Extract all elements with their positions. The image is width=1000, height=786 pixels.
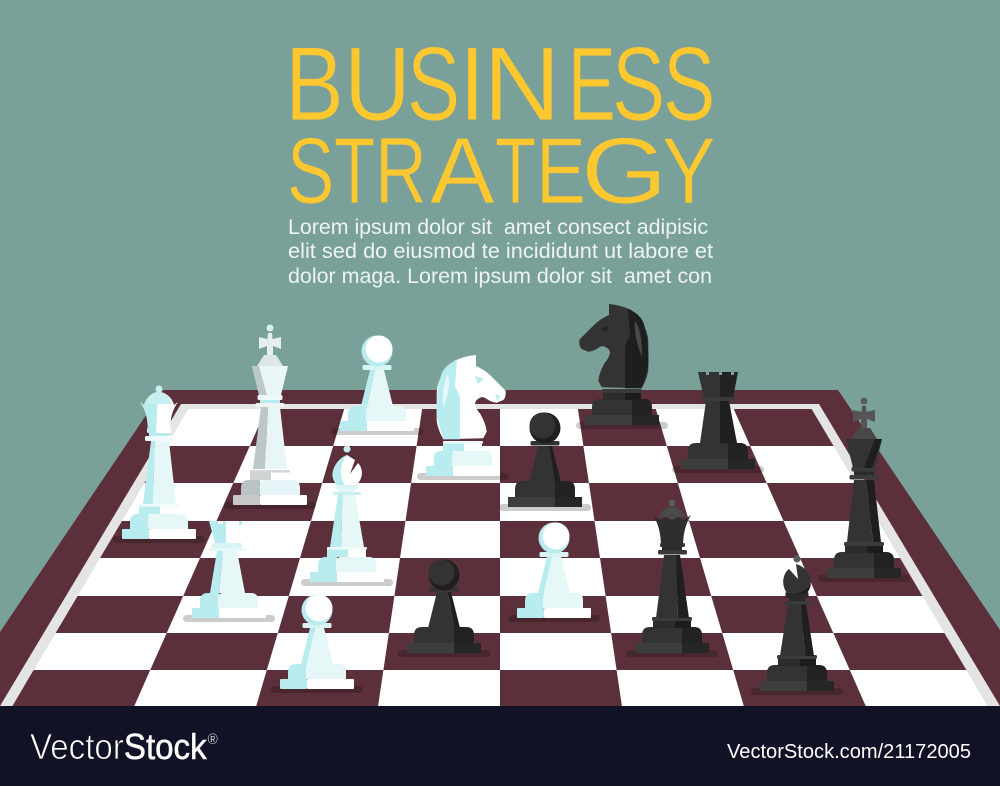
footer logo: ® [208,732,218,748]
intro line 3: dolor maga. Lorem ipsum dolor sit amet con [288,265,712,288]
title: B [285,26,344,143]
title: I [459,26,486,143]
title: T [495,118,536,223]
title: N [483,26,561,143]
board white squares [12,409,988,706]
piece: white rook [183,521,275,622]
piece: black pawn, front [398,560,490,657]
title: G [581,118,668,223]
title: E [536,118,585,223]
piece: white pawn, front [271,594,363,693]
piece: black knight [576,304,668,429]
title: S [612,26,665,143]
piece: white queen [113,386,205,543]
board light border [0,404,1000,706]
title: T [334,118,375,223]
title: R [375,118,427,223]
title: S [662,26,715,143]
footer logo: VectorStock [30,728,207,767]
footer bar [0,706,1000,786]
intro line 2: elit sed do eiusmod te incididunt ut labore et [288,240,713,263]
title: U [344,26,410,143]
footer image id: VectorStock.com/21172005 [727,741,971,763]
board dark squares [12,409,966,706]
intro text block [288,216,713,288]
title: Y [662,118,715,223]
title [285,26,715,223]
intro line 1: Lorem ipsum dolor sit amet consect adipisic [288,216,708,239]
piece: black bishop [751,556,843,695]
title: S [407,26,461,143]
piece: white pawn, center [508,522,600,622]
piece: white knight [417,355,509,480]
title: E [568,26,616,143]
piece: white king [224,324,316,509]
piece: black rook [672,372,764,473]
piece: white bishop [301,446,393,586]
chess board [0,390,1000,706]
title: S [287,118,334,223]
piece: white pawn, back row [331,336,423,435]
board dark frame [0,390,1000,706]
piece: black queen [626,500,718,657]
title: A [430,118,495,223]
piece: black pawn, center [499,412,591,511]
piece: black king [818,398,910,582]
